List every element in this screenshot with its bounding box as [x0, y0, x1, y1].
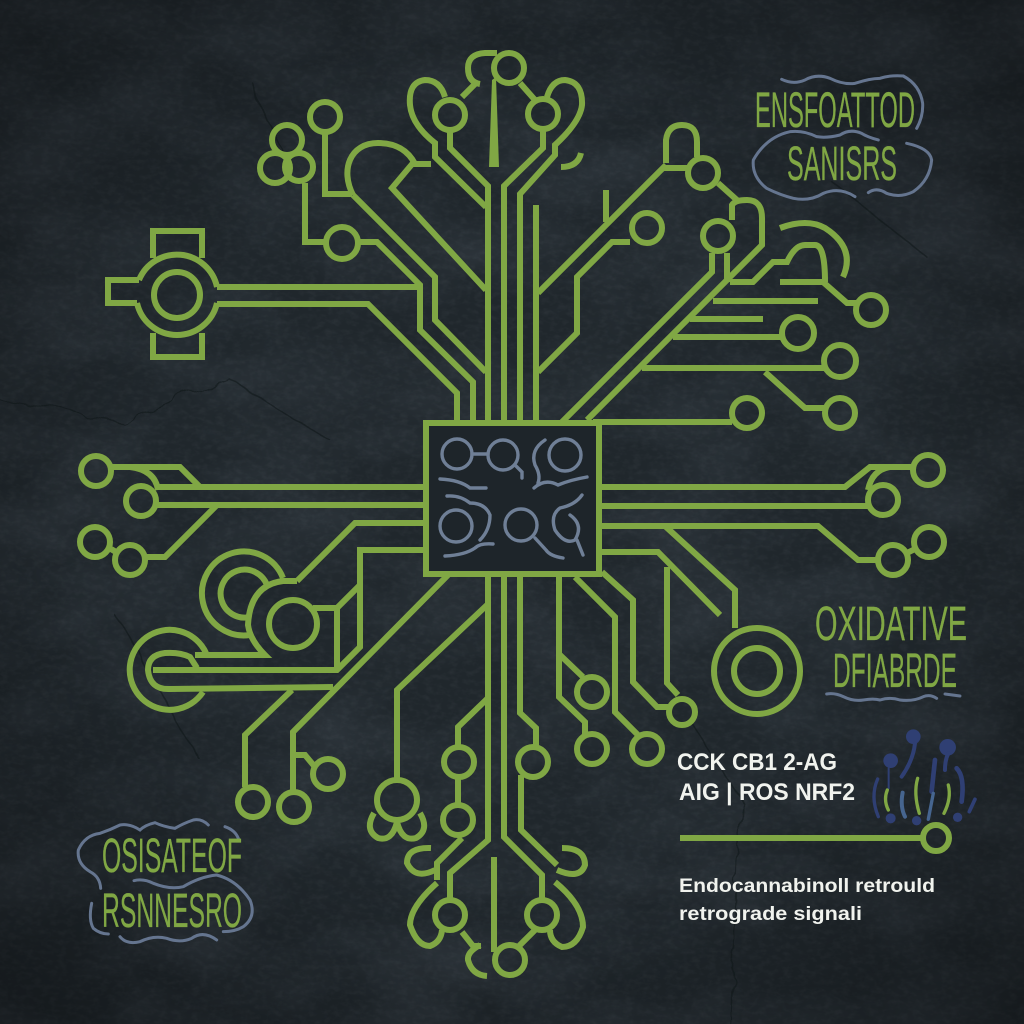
caption line two: retrograde signali — [679, 904, 862, 925]
chip glyphs — [440, 439, 587, 558]
label: bottom left — [78, 820, 252, 943]
heading text: RSNNESRO — [102, 885, 242, 938]
bottom branch — [407, 575, 585, 976]
upper right branch — [536, 125, 886, 428]
key line one: CCK CB1 2-AG — [677, 749, 837, 776]
circuit diagram — [80, 53, 944, 976]
molecule key text — [677, 749, 855, 806]
heading text: SANISRS — [787, 138, 897, 191]
right middle branch — [598, 455, 944, 575]
top branch — [410, 53, 582, 420]
central chip — [426, 423, 599, 574]
icon: blue ink receptors — [874, 729, 975, 825]
label: oxidative — [815, 598, 967, 700]
lower right branch — [559, 526, 800, 764]
wavy underline — [827, 694, 960, 700]
lower left branch — [130, 523, 487, 839]
caption text — [679, 876, 935, 925]
wavy outline — [78, 820, 252, 943]
left middle branch — [80, 456, 427, 575]
key line two: AIG | ROS NRF2 — [679, 779, 855, 806]
caption line one: Endocannabinoll retrould — [679, 876, 935, 897]
upper left branch — [260, 102, 486, 420]
gear node — [108, 231, 457, 420]
heading text: OSISATEOF — [102, 830, 242, 883]
label: top right — [753, 76, 932, 199]
connector line with node — [680, 825, 949, 851]
wavy outline — [753, 76, 932, 199]
